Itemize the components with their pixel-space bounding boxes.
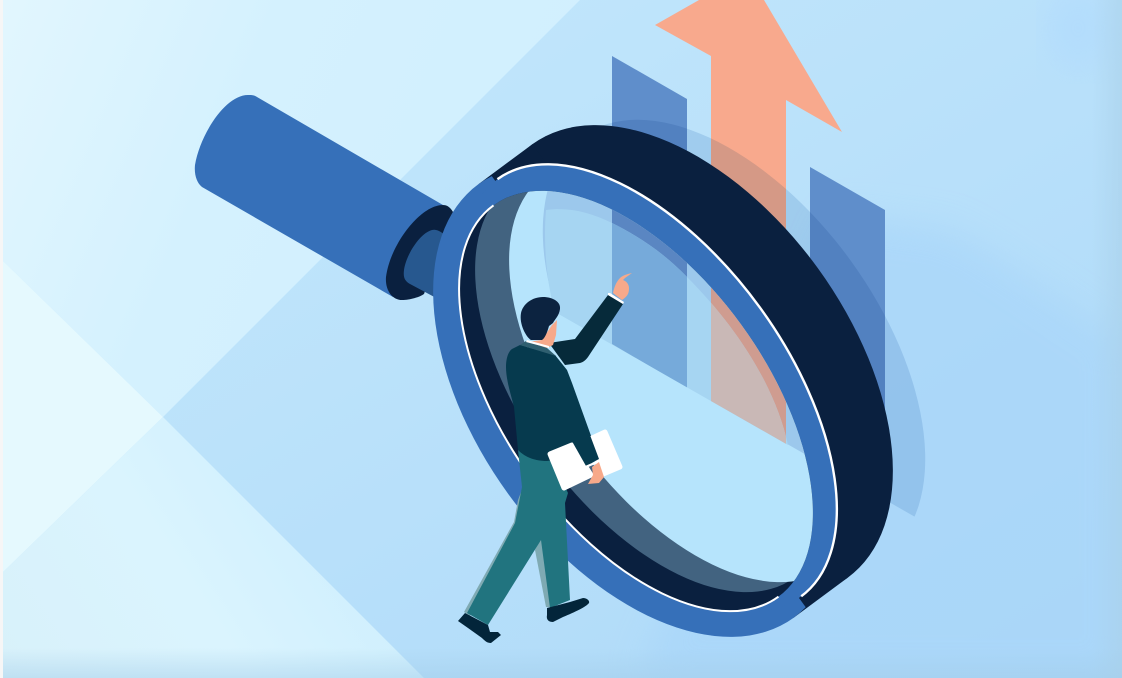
inner wall shade [475,191,813,592]
raised arm [549,295,623,365]
neck and ear [527,320,557,348]
jacket collar [520,341,556,356]
view through lens: ghost, bars and arrow [542,191,804,454]
sleeve cuff [585,460,600,468]
magnifier back body [405,51,975,671]
view through lens [509,190,813,582]
magnifier front ring [433,166,836,637]
tablet [550,432,620,488]
jacket sleeve [553,387,599,466]
translucent ghost lens over bars [604,120,926,516]
back shoe [458,613,501,643]
growth arrow [655,0,842,445]
hair [521,297,560,340]
magnifier handle [195,95,470,300]
shirt cuff [608,293,624,304]
jacket [506,345,599,467]
pointing hand [613,273,632,300]
ring white highlight: inner arc [458,204,779,612]
front shoe [547,598,589,622]
ring white highlight: outer arc [496,163,838,598]
holding hand [588,462,604,484]
lens opening [460,190,813,610]
trouser shadows [464,487,551,616]
bar chart: left bar [612,56,687,388]
shirt collar [526,340,549,348]
businessman figure [458,273,632,643]
bar chart: right bar [810,167,885,500]
trousers [467,450,570,625]
